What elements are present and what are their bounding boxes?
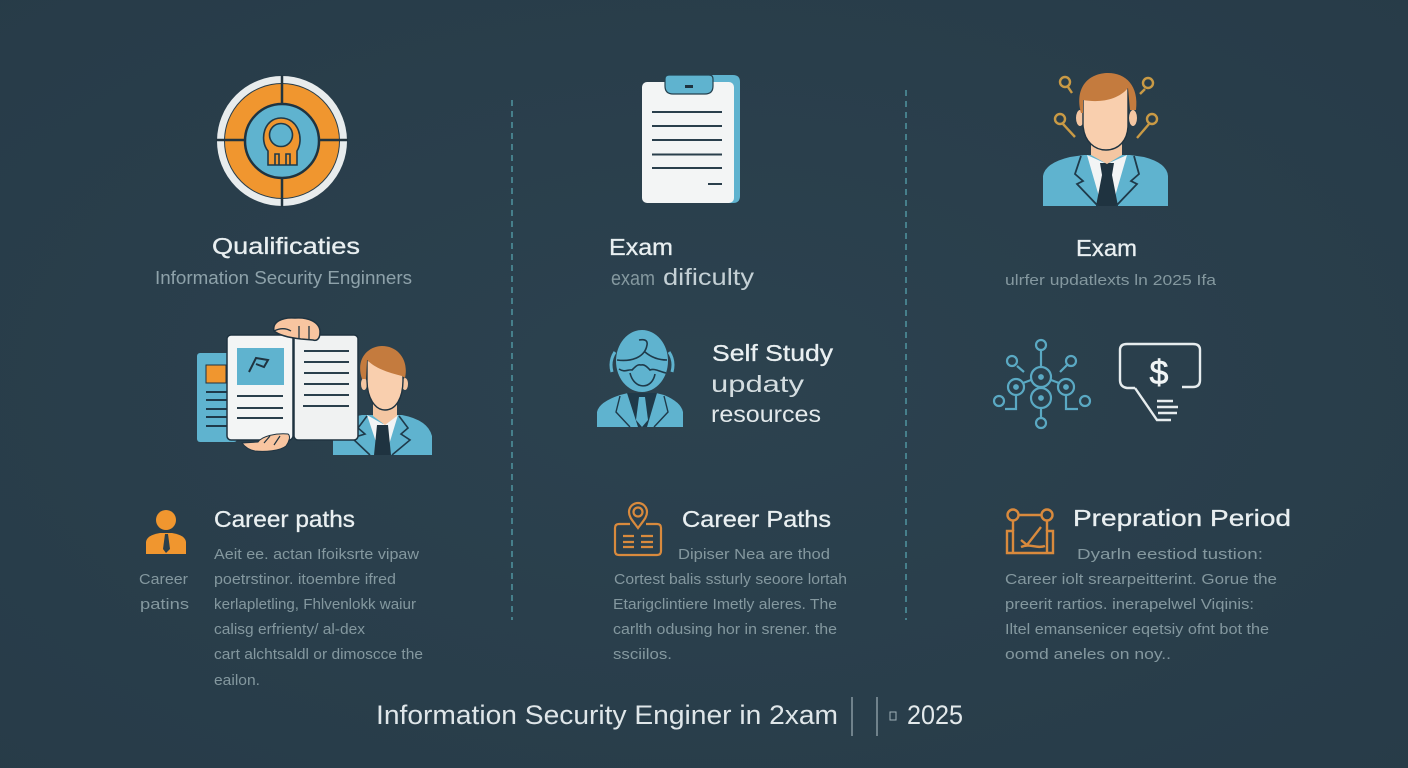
- icon: businessman with nodes: [1043, 73, 1168, 206]
- icon: preparation chart: [1007, 510, 1053, 553]
- subtitle: exam difficulty: [611, 264, 755, 290]
- text block: preparation description: Dyarln eestiod tustion:: [1077, 546, 1263, 563]
- heading: Exam: Exam: [609, 234, 673, 260]
- text block: career paths description: Cortest balis ssturly seoore lortah: [614, 571, 847, 588]
- icon: speech bubble with dollar: [1120, 344, 1200, 420]
- text block: career paths description: ssciilos.: [613, 646, 672, 663]
- icon: clipboard: [642, 75, 740, 203]
- text block: career paths description: carlth odusing hor in srener. the: [613, 621, 837, 638]
- heading: Career Paths: Career Paths: [682, 506, 831, 532]
- footer: exam title and year: Information Security Enginer in 2xam: [376, 700, 838, 730]
- footer: exam title and year: [376, 697, 963, 736]
- text block: career paths description: Aeit ee. actan Ifoiksrte vipaw: [214, 546, 419, 563]
- text block: career paths description: eailon.: [214, 672, 260, 689]
- text block: career paths description: Etarigclintiere Imetly aleres. The: [613, 596, 837, 613]
- text block: preparation description: [1005, 546, 1277, 663]
- text block: career paths description: Dipiser Nea are thod: [678, 546, 830, 563]
- label: Career paths beside icon: [139, 571, 189, 613]
- heading: Self Study updaty resources: updaty: [711, 371, 805, 397]
- text block: preparation description: Iltel emansenicer eqetsiy ofnt bot the: [1005, 621, 1269, 638]
- heading: Prepration Period: Prepration Period: [1073, 505, 1291, 531]
- icon: speech bubble with dollar: $: [1150, 354, 1169, 392]
- subtitle: Information Security Engineers: Information Security Enginners: [155, 268, 412, 288]
- heading: Self Study updaty resources: Self Study: [712, 340, 834, 366]
- text block: career paths description: [613, 546, 847, 663]
- text block: preparation description: Career iolt srearpeitterint. Gorue the: [1005, 571, 1277, 588]
- icon: orange person: [146, 510, 186, 554]
- heading: Career paths: Career paths: [214, 506, 355, 532]
- text block: preparation description: oomd aneles on noy..: [1005, 646, 1171, 663]
- label: Career paths beside icon: patins: [140, 596, 189, 613]
- subtitle: exam difficulty: exam: [611, 268, 655, 290]
- label: Career paths beside icon: Career: [139, 571, 188, 588]
- text block: career paths description: kerlapletling, Fhlvenlokk waiur: [214, 596, 416, 613]
- panel: right column: [994, 73, 1291, 663]
- panel: middle column: [597, 75, 847, 663]
- subtitle: updates in 2025: ulrfer updatlexts ln 2025 Ifa: [1005, 272, 1217, 289]
- icon: map pin card: [615, 503, 661, 555]
- icon: security key target: [216, 75, 348, 207]
- text block: preparation description: preerit rartios. inerapelwel Viqinis:: [1005, 596, 1254, 613]
- text block: career paths description: calisg erfrienty/ al-dex: [214, 621, 366, 638]
- subtitle: exam difficulty: dificulty: [663, 264, 755, 290]
- text block: career paths description: [214, 546, 423, 689]
- heading: Self Study updaty resources: [711, 340, 834, 427]
- heading: Self Study updaty resources: resources: [711, 401, 821, 427]
- heading: Qualificaties: Qualificaties: [212, 233, 360, 259]
- icon: network nodes: [994, 340, 1090, 428]
- footer: exam title and year: 2025: [907, 700, 963, 730]
- icon: self study person: [597, 330, 683, 427]
- text block: career paths description: cart alchtsaldl or dimoscce the: [214, 646, 423, 663]
- icon: document held by hands with businessman: [197, 318, 432, 455]
- text block: career paths description: poetrstinor. itoembre ifred: [214, 571, 396, 588]
- panel: left column: [139, 75, 432, 689]
- heading: Exam: Exam: [1076, 235, 1137, 261]
